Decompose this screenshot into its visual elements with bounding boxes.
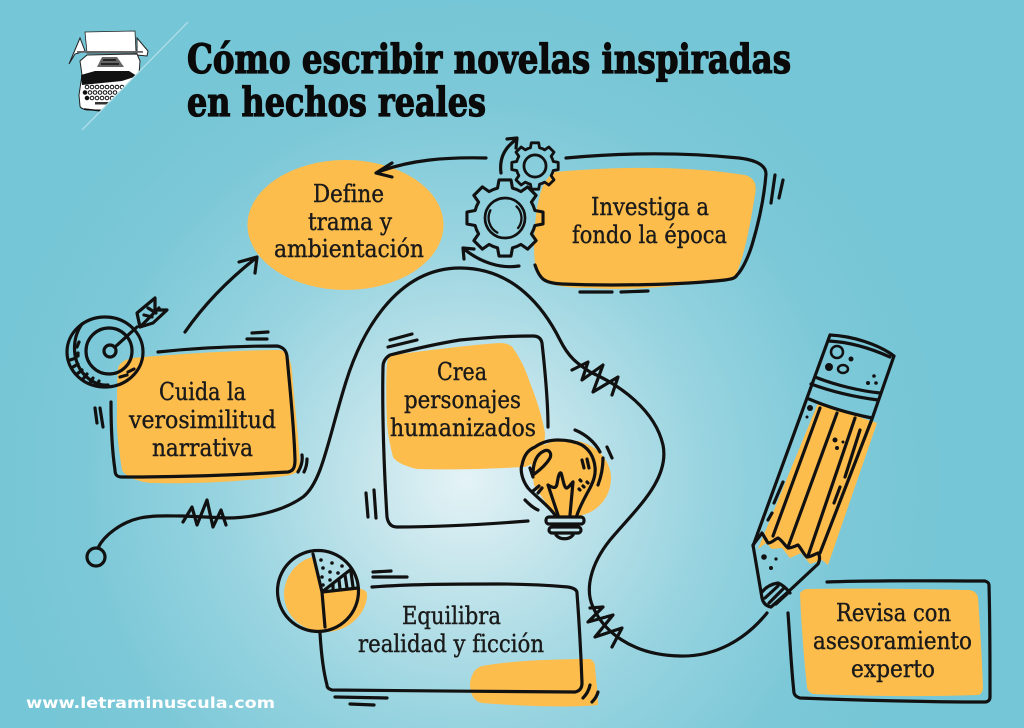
diagonal line bbox=[82, 22, 188, 130]
icon: gears bbox=[463, 138, 558, 267]
step: equilibra realidad y ficción bbox=[320, 571, 598, 706]
step: investiga a fondo la época bbox=[534, 154, 783, 292]
step: define trama y ambientación: Define bbox=[313, 180, 384, 208]
title bbox=[187, 36, 791, 126]
arrow: cuida to define bbox=[185, 257, 257, 332]
step: crea personajes humanizados: Crea bbox=[437, 358, 487, 386]
icon: target with arrow bbox=[67, 298, 167, 387]
title: en hechos reales bbox=[187, 79, 486, 126]
step: revisa con asesoramiento experto: asesoramiento bbox=[813, 627, 972, 655]
step: cuida la verosimilitud narrativa: verosimilitud bbox=[128, 406, 276, 434]
step: revisa con asesoramiento experto: experto bbox=[851, 655, 935, 683]
step: revisa con asesoramiento experto: Revisa con bbox=[836, 599, 951, 627]
icon: typewriter bbox=[69, 22, 188, 130]
icon: pie chart bbox=[278, 550, 367, 632]
icon: light bulb bbox=[521, 430, 612, 539]
step: cuida la verosimilitud narrativa: Cuida la bbox=[159, 378, 246, 406]
step: investiga a fondo la época: Investiga a bbox=[591, 193, 709, 221]
step: crea personajes humanizados: personajes bbox=[404, 386, 521, 414]
step: equilibra realidad y ficción: realidad y ficción bbox=[358, 630, 544, 658]
step: define trama y ambientación: trama y bbox=[308, 208, 392, 236]
title: Cómo escribir novelas inspiradas bbox=[187, 36, 791, 83]
step: define trama y ambientación: ambientación bbox=[274, 235, 424, 263]
step: equilibra realidad y ficción: Equilibra bbox=[402, 602, 501, 630]
arrow: investiga to define bbox=[376, 158, 486, 177]
connector: main curve bbox=[87, 268, 767, 656]
step: crea personajes humanizados bbox=[366, 334, 548, 527]
icon: pencil bbox=[753, 335, 894, 607]
step: investiga a fondo la época: fondo la época bbox=[572, 221, 727, 249]
step: define trama y ambientación bbox=[248, 160, 444, 290]
step: revisa con asesoramiento experto bbox=[788, 581, 990, 702]
step: cuida la verosimilitud narrativa: narrativa bbox=[152, 434, 253, 462]
step: crea personajes humanizados: humanizados bbox=[390, 414, 536, 442]
step: cuida la verosimilitud narrativa bbox=[95, 332, 307, 483]
footer url: www.letraminuscula.com bbox=[26, 694, 275, 712]
